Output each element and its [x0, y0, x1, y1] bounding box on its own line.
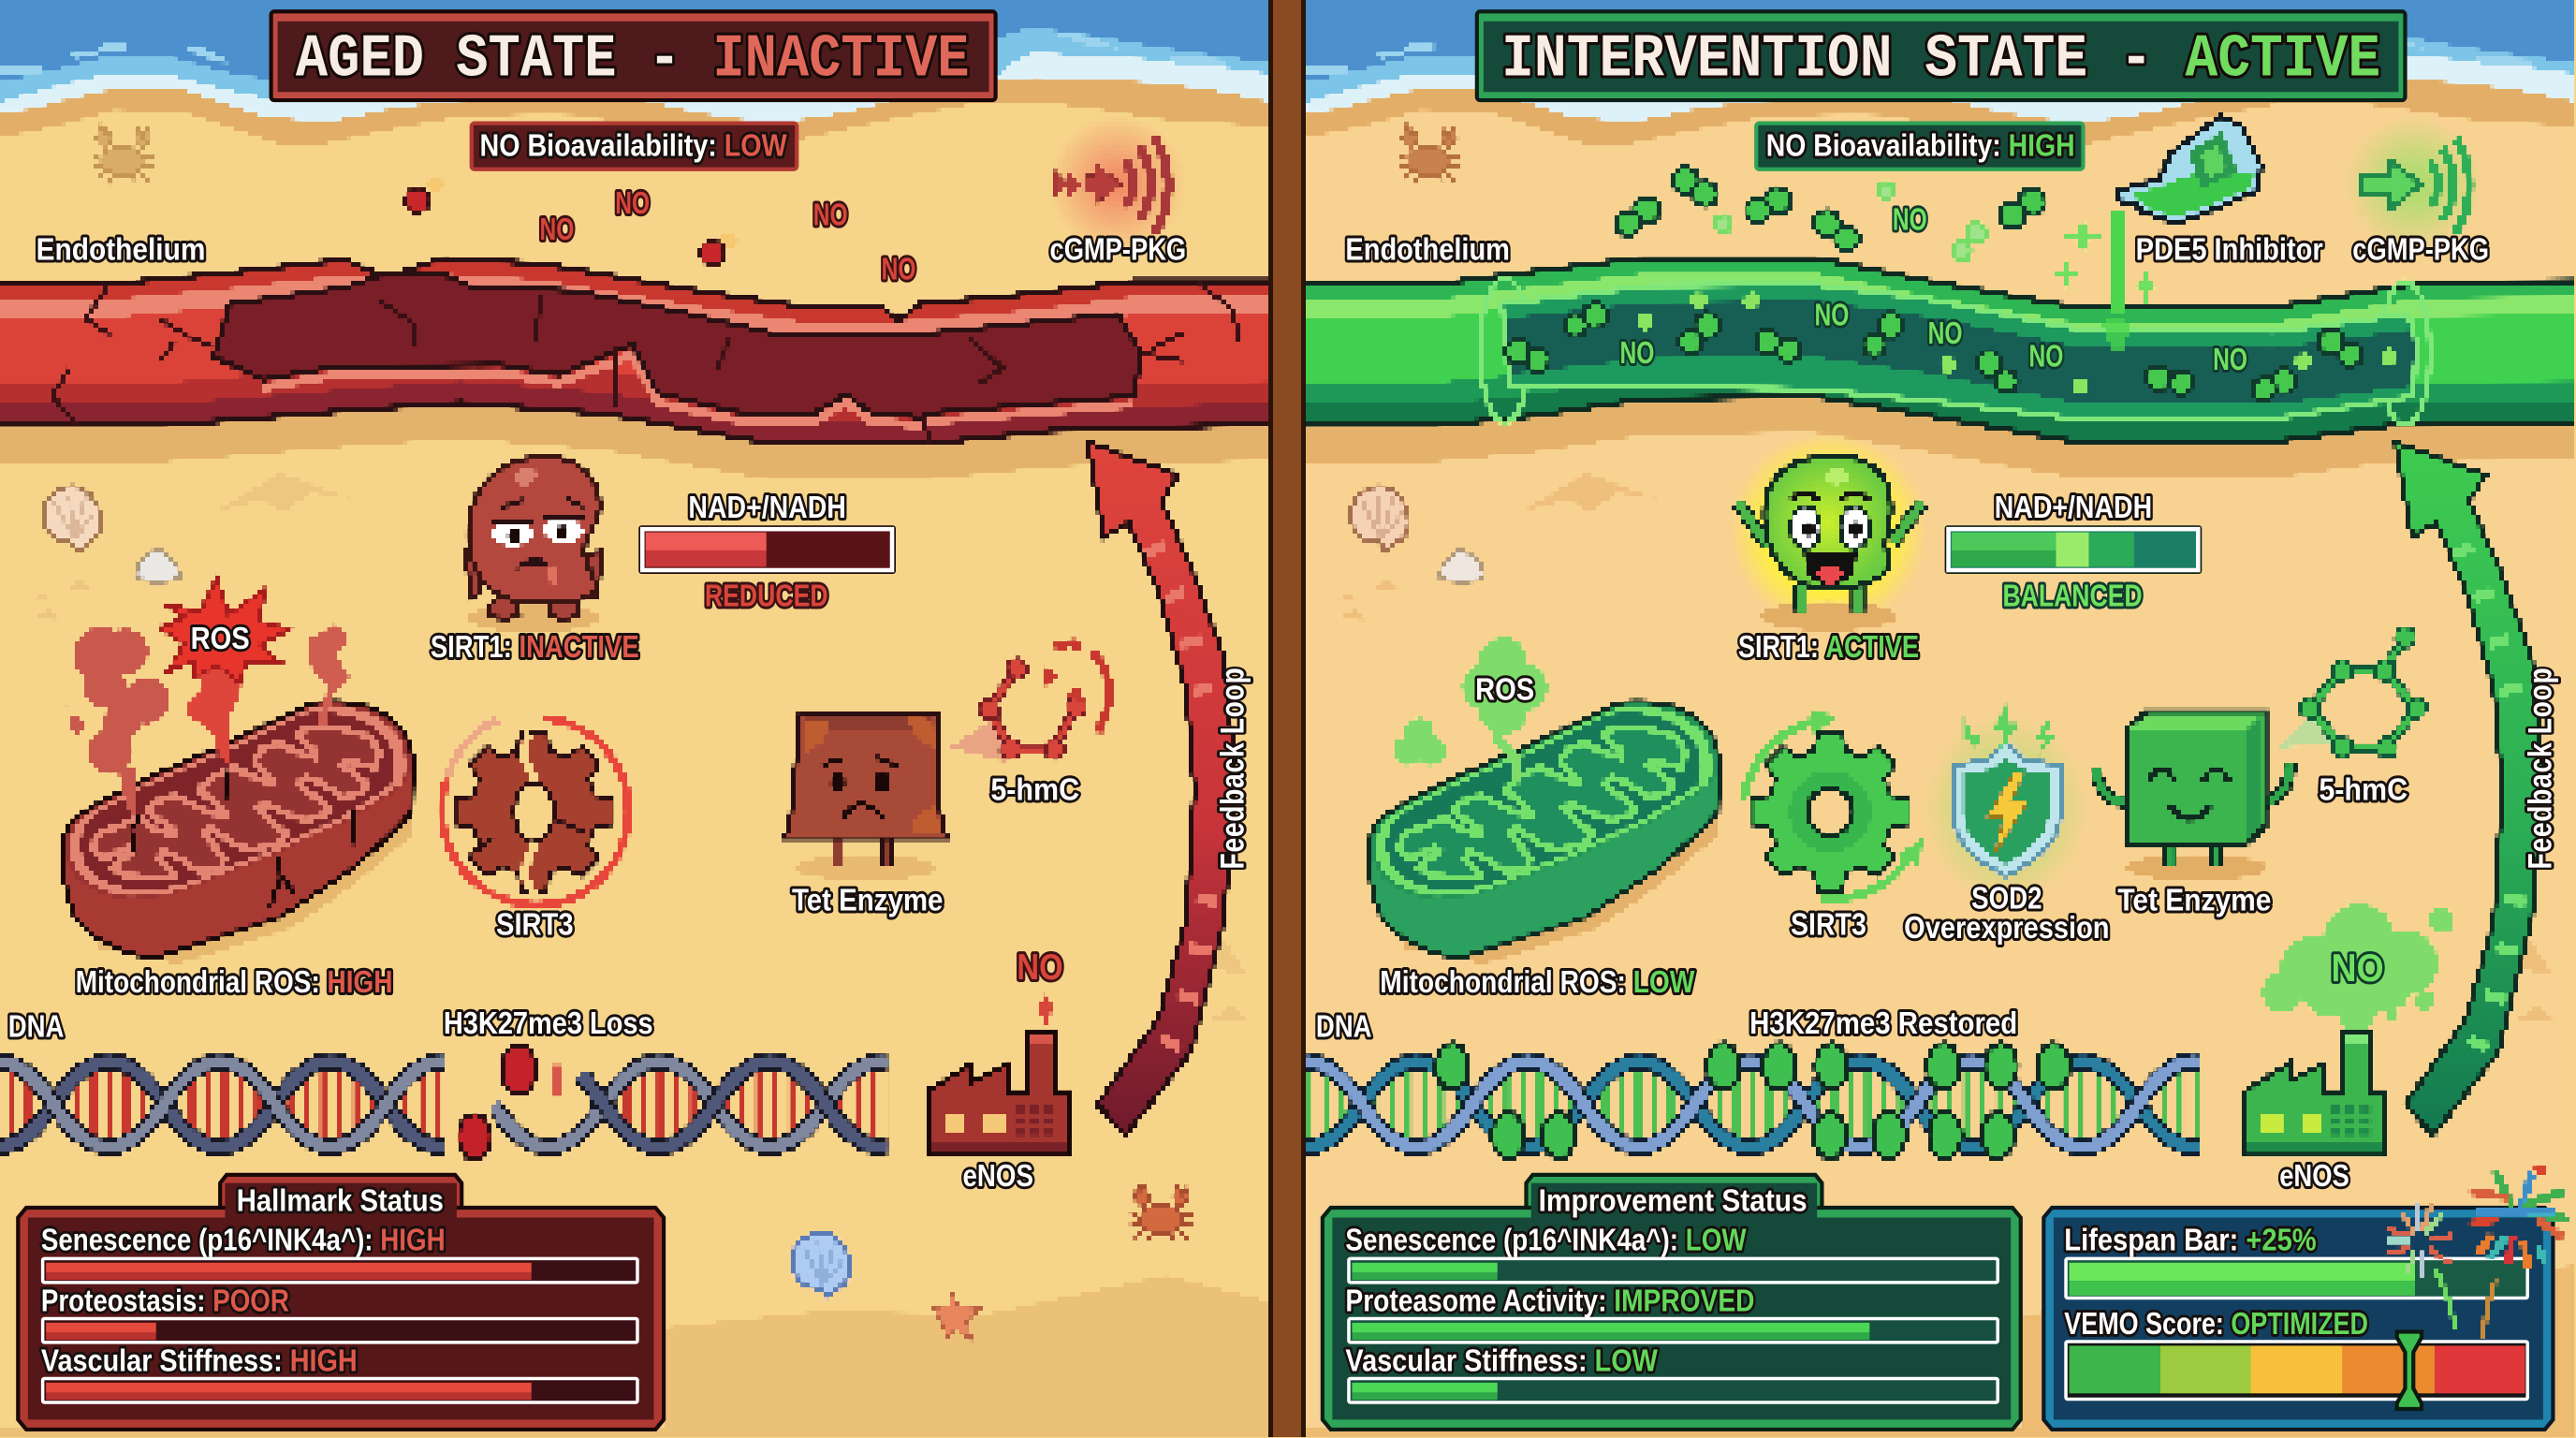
eNOS factory red: [929, 992, 1068, 1155]
label: DNA right: DNA: [1316, 1009, 1372, 1044]
label: NO smoke left: NO: [1017, 947, 1063, 988]
vessel shadow left: [0, 414, 1268, 455]
shell left: [43, 487, 101, 552]
row: vascular stiffness: Vascular Stiffness: HIGH: [41, 1344, 358, 1379]
firework large: [2469, 1170, 2568, 1269]
background: aged sand: [0, 0, 1270, 1438]
label: SIRT3 right: SIRT3: [1791, 908, 1866, 943]
lumen open: [1501, 285, 2417, 419]
vessel right: healthy: [1306, 258, 2576, 442]
5-hmC intact: [2277, 627, 2426, 757]
NO molecules above vessel: [1616, 168, 2045, 251]
vessel shadow right: [1306, 407, 2576, 453]
feedback arrow red: [1088, 442, 1236, 1136]
eNOS factory green with NO cloud: [2245, 903, 2454, 1155]
Tet enzyme sad: [785, 713, 946, 881]
5-hmC damaged: [949, 643, 1109, 762]
label: SIRT1 inactive: SIRT1: INACTIVE: [431, 630, 639, 665]
blue shell: [792, 1232, 850, 1299]
row: lifespan bar: [2064, 1224, 2527, 1299]
panel: lifespan and VEMO score: [2043, 1208, 2553, 1430]
NO labels intervention: NO: [1815, 299, 1849, 333]
panel heading: Hallmark Status: [237, 1184, 444, 1219]
label: Endothelium right: Endothelium: [1345, 232, 1510, 267]
label: PDE5 Inhibitor: PDE5 Inhibitor: [2136, 232, 2323, 267]
NO labels aged: NO: [615, 186, 650, 221]
crab bottom-left panel: [1131, 1184, 1193, 1242]
lumen rings: [1480, 278, 2430, 426]
sparkles: [2054, 217, 2162, 305]
badge text high: NO Bioavailability: HIGH: [1766, 129, 2075, 164]
NO molecules in lumen: [1506, 303, 2363, 401]
radicals red: [405, 176, 738, 265]
row: proteostasis: Proteostasis: POOR: [41, 1284, 289, 1319]
DNA left intact segment: [0, 1062, 497, 1147]
row: proteasome activity: Proteasome Activity: IMPROVED: [1345, 1284, 1754, 1319]
crab top-right: [1398, 126, 1460, 184]
row: VEMO score: [2064, 1307, 2527, 1409]
panel frame: [1323, 1208, 2021, 1430]
label: ROS cloud: ROS: [1475, 673, 1534, 708]
ROS cloud small: [1393, 638, 1547, 782]
shore right: [1306, 0, 2574, 144]
PDE5 inhibitor bottle: [2103, 117, 2261, 352]
small glowing NO particles in lumen: [1636, 292, 2397, 394]
label: eNOS right: eNOS: [2279, 1159, 2349, 1194]
faint NO rings above vessel: [1715, 183, 1986, 260]
label: Feedback Loop right: Feedback Loop: [2523, 668, 2559, 869]
row: proteostasis: [41, 1284, 637, 1343]
label: ROS burst: ROS: [191, 622, 250, 656]
panel: improvement status: [1323, 1175, 2021, 1430]
sand marks right: [1336, 473, 2558, 1022]
SIRT3 healthy gear: [1743, 708, 1922, 899]
panel frame: [18, 1208, 664, 1430]
label: Mitochondrial ROS low: Mitochondrial ROS: LOW: [1380, 965, 1695, 1000]
panel heading: Improvement Status: [1539, 1184, 1808, 1219]
rock left: [136, 550, 179, 581]
label: eNOS left: eNOS: [962, 1159, 1033, 1194]
feedback arrow green: [2395, 442, 2543, 1136]
DNA left broken segment: [493, 1062, 936, 1147]
NAD/NADH meter intervention: NAD+/NADH: [1995, 491, 2152, 525]
panel: hallmark status: [18, 1175, 664, 1430]
firework small: [2385, 1204, 2452, 1278]
NO labels aged: NO: [540, 213, 574, 247]
SOD2 shield: [1924, 700, 2088, 903]
NO labels intervention: NO: [1893, 203, 1927, 238]
label: SOD2 Overexpression: Overexpression: [1904, 911, 2110, 946]
label: Tet Enzyme left: Tet Enzyme: [792, 883, 943, 917]
NAD/NADH meter aged: REDUCED: [705, 580, 828, 614]
title text: aged state: AGED STATE - INACTIVE: [296, 26, 970, 95]
background: intervention sand: [1306, 0, 2576, 1438]
label: SOD2 Overexpression: [1904, 882, 2110, 946]
rock right: [1441, 550, 1484, 581]
VEMO slider: [2397, 1332, 2422, 1409]
NO labels intervention: NO: [1620, 336, 1654, 371]
label: 5-hmC right: 5-hmC: [2319, 773, 2408, 808]
NO labels intervention: NO: [1928, 316, 1962, 351]
NAD/NADH meter aged: NAD+/NADH: [688, 491, 846, 525]
row: proteasome activity: [1345, 1284, 1998, 1343]
row: senescence: [41, 1224, 637, 1283]
row: senescence: Senescence (p16^INK4a^): HIGH: [41, 1224, 446, 1258]
label: cGMP-PKG left: cGMP-PKG: [1050, 232, 1186, 267]
label: H3K27me3 Restored: H3K27me3 Restored: [1749, 1006, 2017, 1041]
row: lifespan bar: Lifespan Bar: +25%: [2064, 1224, 2317, 1258]
DNA right restored: [1251, 1062, 2249, 1147]
label: SIRT3 left: SIRT3: [496, 908, 574, 943]
badge text low: NO Bioavailability: LOW: [479, 129, 787, 164]
row: vascular stiffness: [1345, 1344, 1998, 1402]
shore left: [0, 0, 1268, 144]
crab top-left: [92, 126, 154, 184]
center divider post: [1266, 0, 1306, 1438]
sand dunes right: [1306, 1265, 2576, 1438]
label: Endothelium left: Endothelium: [37, 232, 205, 267]
row: VEMO score: VEMO Score: OPTIMIZED: [2064, 1307, 2368, 1342]
NAD/NADH meter aged: [640, 491, 895, 614]
badge: NO bioavailability high: [1756, 124, 2083, 169]
title plaque: intervention state: [1477, 11, 2405, 100]
panel tab: [220, 1175, 461, 1219]
label: Tet Enzyme right: Tet Enzyme: [2117, 883, 2271, 917]
Tet enzyme happy: [2097, 712, 2291, 881]
sand marks left: [30, 473, 1251, 1022]
NO labels intervention: NO: [2213, 343, 2247, 377]
NO labels aged: NO: [813, 198, 848, 232]
cGMP-PKG icon: weak signal: [1048, 115, 1186, 253]
fireworks: [2385, 1170, 2568, 1339]
NAD/NADH meter intervention: [1946, 491, 2201, 614]
label: Mitochondrial ROS high: Mitochondrial ROS: HIGH: [76, 965, 392, 1000]
row: vascular stiffness: Vascular Stiffness: LOW: [1345, 1344, 1658, 1379]
NO labels intervention: NO: [2029, 339, 2063, 374]
lost H3K27me3 marks: [459, 1045, 564, 1160]
title plaque: aged state: [271, 11, 996, 100]
title text: intervention state: INTERVENTION STATE - ACTIVE: [1501, 26, 2380, 95]
label: DNA left: DNA: [8, 1009, 64, 1044]
shell right: [1351, 487, 1409, 552]
sand dunes left: [0, 1275, 1268, 1438]
row: senescence: Senescence (p16^INK4a^): LOW: [1345, 1224, 1747, 1258]
lumen: [213, 274, 1142, 418]
label: SOD2 Overexpression: SOD2: [1971, 882, 2042, 917]
label: Feedback Loop left: Feedback Loop: [1215, 668, 1251, 869]
SIRT1 sad character: [465, 457, 603, 633]
damaged mitochondrion: [66, 704, 411, 964]
ROS smoke left: [67, 624, 349, 814]
label: NO cloud right: NO: [2331, 946, 2384, 990]
NO labels aged: NO: [882, 252, 915, 286]
row: senescence: [1345, 1224, 1998, 1283]
NAD/NADH meter intervention: BALANCED: [2002, 580, 2143, 614]
cracks: [52, 285, 1240, 444]
NO labels intervention: [1620, 203, 2247, 377]
cGMP-PKG icon: strong signal: [2345, 115, 2482, 253]
SIRT1 happy character: [1730, 433, 1927, 631]
row: vascular stiffness: [41, 1344, 637, 1402]
badge: NO bioavailability low: [472, 124, 797, 169]
NO labels aged: [540, 186, 915, 286]
starfish: [933, 1288, 981, 1341]
panel tab: [1526, 1175, 1822, 1219]
healthy mitochondrion: [1371, 704, 1717, 964]
ROS burst: [159, 579, 289, 682]
label: SIRT1 active: SIRT1: ACTIVE: [1738, 630, 1919, 665]
SIRT3 damaged gear: [442, 718, 628, 905]
label: H3K27me3 Loss: H3K27me3 Loss: [444, 1006, 653, 1041]
label: 5-hmC left: 5-hmC: [990, 773, 1079, 808]
endothelium vessel: damaged: [0, 258, 1268, 444]
lumen pale rim: [263, 355, 1134, 426]
H3K27me3 restored marks: [1436, 1043, 2070, 1158]
firework trails: [2437, 1270, 2496, 1339]
label: cGMP-PKG right: cGMP-PKG: [2352, 232, 2489, 267]
